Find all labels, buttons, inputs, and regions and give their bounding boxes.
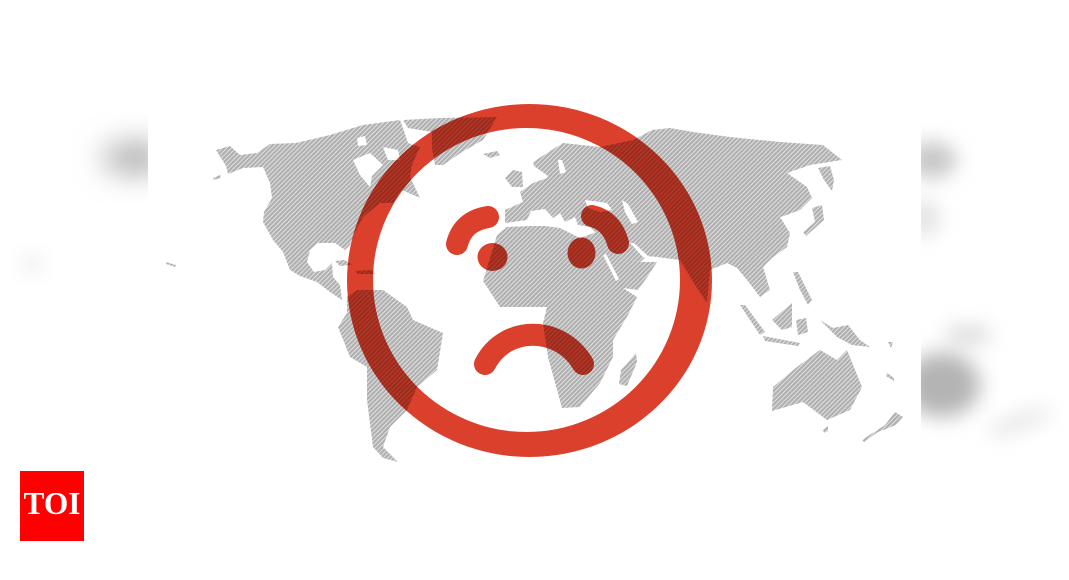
New Zealand	[862, 412, 903, 442]
inland seas	[353, 136, 648, 281]
Kamchatka	[818, 166, 834, 191]
Greenland	[403, 117, 497, 165]
sad face	[347, 104, 712, 457]
Pacific islands	[888, 342, 893, 348]
Madagascar	[619, 353, 637, 386]
Eurasia	[505, 128, 842, 303]
left eye	[478, 243, 508, 271]
right eye	[568, 238, 596, 268]
right eyebrow	[592, 216, 618, 243]
blurred background map	[23, 142, 1054, 440]
Japan	[803, 205, 824, 236]
Tasmania	[823, 426, 828, 433]
United Kingdom and Ireland	[505, 170, 523, 187]
South America	[338, 290, 443, 462]
Africa and Arabia	[483, 226, 657, 408]
white central panel	[148, 60, 921, 480]
hatched world map	[166, 117, 903, 462]
left eyebrow	[457, 217, 488, 244]
Indochina tip and Southeast Asia islands	[740, 305, 765, 335]
North and Central America	[216, 120, 420, 300]
Caribbean and small western islands	[335, 260, 352, 266]
face ring	[347, 104, 712, 457]
TOI logo: TOI	[24, 485, 80, 521]
TOI logo	[20, 471, 84, 541]
Australia	[772, 350, 862, 420]
frown	[485, 335, 583, 364]
